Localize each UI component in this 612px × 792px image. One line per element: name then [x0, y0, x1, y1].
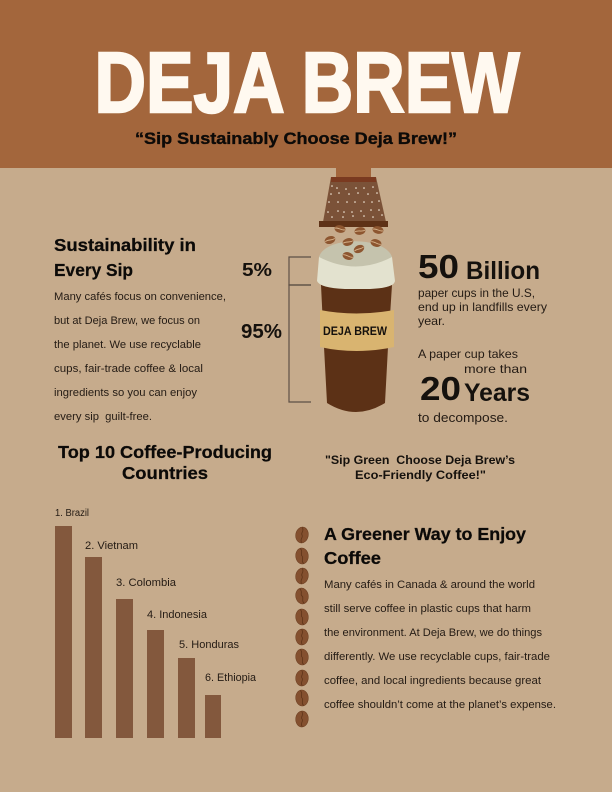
- chart heading: Top 10 Coffee-Producing: [58, 442, 272, 462]
- bar: Vietnam: 2. Vietnam: [85, 540, 138, 552]
- heading: [54, 235, 196, 280]
- bar: Colombia: 3. Colombia: [116, 577, 177, 589]
- body text: coffee, and local ingredients because great: [324, 675, 541, 687]
- tagline: “Sip Sustainably Choose Deja Brew!”: [135, 129, 457, 148]
- stat: 50 billion cups: end up in landfills every: [418, 300, 547, 314]
- stat: 20 years: to decompose.: [418, 410, 508, 425]
- title: DEJA BREW: [94, 36, 520, 131]
- body text: every sip guilt-free.: [54, 411, 152, 423]
- body text: the planet. We use recyclable: [54, 339, 201, 351]
- panel: greener way: [324, 524, 556, 711]
- body text: still serve coffee in plastic cups that harm: [324, 603, 531, 615]
- stat: 50 billion cups: 50: [418, 248, 459, 285]
- body text: but at Deja Brew, we focus on: [54, 315, 200, 327]
- heading: Coffee: [324, 548, 381, 568]
- bar: Honduras: [178, 639, 239, 738]
- bar: Ethiopia: 6. Ethiopia: [205, 672, 257, 684]
- body text: differently. We use recyclable cups, fair-trade: [324, 651, 550, 663]
- quote: [325, 453, 515, 482]
- sleeve label: DEJA BREW: [323, 324, 388, 338]
- label: 95 percent: 95%: [241, 321, 282, 343]
- stat: 20 years: [418, 347, 530, 425]
- icon: coffee cup illustration: [317, 165, 395, 412]
- quote: "Sip Green Choose Deja Brew’s: [325, 453, 515, 467]
- label: 5 percent: 5%: [242, 260, 272, 280]
- body text: Many cafés focus on convenience,: [54, 291, 226, 303]
- cup sleeve: [320, 310, 394, 351]
- bar: Brazil: [55, 508, 89, 738]
- stat: 50 billion cups: year.: [418, 314, 445, 328]
- body text: Many cafés in Canada & around the world: [324, 579, 535, 591]
- bar: Ethiopia: [205, 672, 257, 738]
- bar chart: [55, 508, 257, 738]
- stat: 20 years: 20: [420, 370, 461, 407]
- bar: Brazil: 1. Brazil: [55, 508, 89, 519]
- stat: 50 billion cups: paper cups in the U.S,: [418, 286, 535, 300]
- quote: Eco-Friendly Coffee!": [355, 468, 486, 482]
- heading: A Greener Way to Enjoy: [324, 524, 526, 544]
- chart heading: Countries: [122, 463, 208, 483]
- stat: 20 years: A paper cup takes: [418, 347, 518, 361]
- body text: cups, fair-trade coffee & local: [54, 363, 203, 375]
- icon: column of coffee beans: [294, 526, 310, 728]
- body text: [324, 579, 556, 711]
- heading: Sustainability in: [54, 235, 196, 255]
- heading: [324, 524, 526, 568]
- cup lid: [317, 241, 395, 289]
- bar: Honduras: 5. Honduras: [179, 639, 239, 651]
- falling coffee beans: [324, 224, 384, 261]
- stat: 20 years: Years: [464, 379, 530, 407]
- bracket: 5 percent: [289, 257, 311, 285]
- chart heading: [58, 442, 272, 483]
- stat: 20 years: more than: [464, 362, 527, 376]
- body text: the environment. At Deja Brew, we do things: [324, 627, 543, 639]
- bar: Colombia: [116, 577, 177, 738]
- cup body: [321, 285, 392, 412]
- bar: Vietnam: [85, 540, 138, 738]
- heading: Every Sip: [54, 260, 133, 280]
- header banner: [0, 0, 612, 168]
- body text: ingredients so you can enjoy: [54, 387, 197, 399]
- body text: coffee shouldn’t come at the planet’s expense.: [324, 699, 556, 711]
- cup top with dotted sleeve: [319, 177, 388, 227]
- bar: Indonesia: 4. Indonesia: [147, 609, 208, 621]
- stat: 50 billion cups: Billion: [466, 257, 540, 285]
- bracket: 95 percent: [289, 285, 311, 402]
- stat: 50 billion cups: [418, 248, 547, 328]
- body text: [54, 291, 226, 423]
- panel: sustainability: [54, 235, 226, 423]
- bar: Indonesia: [147, 609, 208, 738]
